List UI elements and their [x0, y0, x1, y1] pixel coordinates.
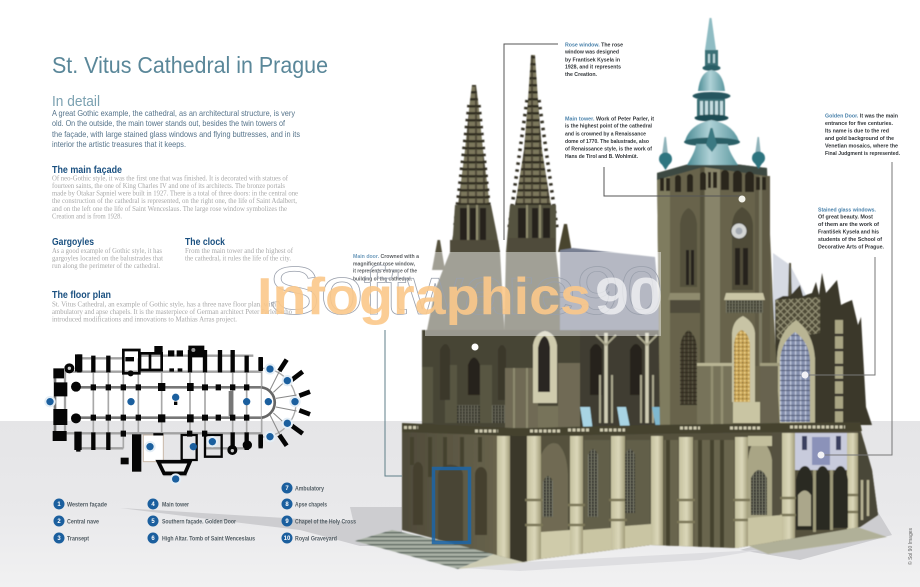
- legend: floor plan key: Royal Graveyard: [295, 536, 337, 542]
- callout: stained glass windows: Of great beauty. Most: [818, 215, 873, 221]
- callout: golden door: Golden Door. It was the main: [825, 113, 898, 119]
- watermark: Infographics: [257, 268, 591, 326]
- watermark: 90: [595, 268, 663, 326]
- section: the main façade: the construction of the cathedral is represented, on the right one, the life of Saint Adalbert,: [52, 196, 297, 205]
- section: the clock: From the main tower and the highest of: [185, 246, 294, 255]
- callout: golden door: and gold background of the: [825, 136, 895, 142]
- callout: stained glass windows: František Kysela and his: [818, 230, 879, 236]
- background: ground: [0, 421, 920, 587]
- legend: floor plan key: Ambulatory: [295, 486, 325, 492]
- section: gargoyles: [52, 236, 163, 270]
- callout: main door: it represents entrance of the: [353, 269, 418, 275]
- text block: introduction: A great Gothic example, the cathedral, as an architectural structure, is very: [52, 109, 296, 118]
- callout: rose window: [564, 42, 624, 78]
- right choir and buttresses: [773, 253, 872, 425]
- floor plan: [44, 346, 310, 485]
- left spire: [455, 85, 491, 225]
- callout: main tower: and is crowned by a Renaissance: [565, 131, 647, 137]
- legend: floor plan key: 3: [57, 536, 61, 542]
- callout: main tower: is the highest point of the cathedral: [565, 124, 652, 130]
- section: gargoyles: As a good example of Gothic style, it has: [52, 246, 162, 255]
- legend: floor plan key: Central nave: [67, 520, 100, 526]
- callout: main tower: [565, 117, 654, 160]
- callout: stained glass windows: Decorative Arts of Prague.: [818, 245, 884, 251]
- legend: floor plan key: [54, 482, 357, 544]
- section: the floor plan: introduced modifications and innovations to Mathias Arras project.: [52, 314, 237, 324]
- legend: floor plan key: 8: [285, 502, 289, 508]
- marker: rose window: [472, 344, 478, 350]
- callout lines: [385, 44, 892, 476]
- legend: floor plan key: Apse chapels: [295, 502, 328, 508]
- callout: rose window: window was designed: [564, 50, 619, 56]
- section: the main façade: made by Otakar Sapniel were built in 1927. There is a total of three doors: in the central one: [52, 188, 298, 198]
- callout: golden door: Venetian mosaics, where the: [825, 143, 899, 149]
- callout: rose window: 1928, and it represents: [565, 65, 621, 71]
- text block: introduction: interior the artistic treasures that it keeps.: [52, 140, 186, 149]
- callout: rose window: the Creation.: [565, 72, 597, 78]
- callout: main door: building of the cathedral.: [353, 276, 412, 282]
- image credit: © Sol 90 Images: [907, 528, 914, 565]
- section: the clock: the cathedral, it rules the life of the city.: [185, 254, 291, 262]
- pilasters: [497, 433, 858, 567]
- text block: introduction: [52, 109, 300, 149]
- plan number markers: [44, 363, 301, 485]
- callout: rose window: Rose window. The rose: [565, 42, 624, 48]
- callout: main tower: of Renaissance style, is the work of: [565, 146, 652, 152]
- callout: main door: Main door. Crowned with a: [353, 254, 420, 260]
- stone steps: [355, 527, 887, 569]
- legend: floor plan key: 6: [151, 536, 155, 542]
- legend: floor plan key: 4: [151, 502, 155, 508]
- callout: golden door: Its name is due to the red: [825, 129, 889, 135]
- legend: floor plan key: High Altar. Tomb of Saint Wenceslaus: [162, 536, 256, 542]
- marker: main tower: [738, 196, 746, 202]
- twin tower bodies: [425, 205, 572, 340]
- callout: stained glass windows: of them are the work of: [818, 222, 879, 228]
- section: the floor plan: The floor plan: [52, 289, 111, 301]
- watermark: Software90: [268, 253, 663, 329]
- callout: golden door: [825, 113, 900, 157]
- section: gargoyles: run along the perimeter of the cathedral.: [52, 261, 160, 270]
- right spire: [509, 55, 557, 228]
- callout: stained glass windows: students of the School of: [818, 237, 882, 243]
- callout: main tower: Hans de Tirol and B. Wohlmüt.: [565, 154, 638, 160]
- balustrade: [402, 422, 862, 436]
- text block: introduction: old. On the outside, the main tower stands out, besides the twin towers of: [52, 119, 286, 128]
- callout: main door: [353, 254, 420, 282]
- title: St. Vitus Cathedral in Prague: [52, 52, 328, 78]
- callout: golden door: Final Judgment is represented.: [825, 151, 900, 157]
- section: the main façade: fourteen saints, the one of King Charles IV and one of its architects. The bronze portals: [52, 181, 285, 190]
- legend: floor plan key: Chapel of the Holy Cross: [295, 520, 357, 526]
- callout: main tower: dome of 1770. The balustrade, also: [565, 139, 649, 145]
- section: the clock: [185, 236, 294, 262]
- upper façade: [422, 330, 663, 433]
- cathedral illustration: [355, 18, 887, 569]
- legend: floor plan key: Main tower: [162, 502, 190, 508]
- callout: rose window: by Frantisek Kysela in: [565, 57, 620, 63]
- section: the main façade: Of neo-Gothic style, it was the first one that was finished. It is decorated with statues of: [52, 174, 289, 182]
- section: the main façade: and on the left one the life of Saint Wenceslaus. The large rose window symbolizes the: [52, 204, 287, 213]
- tower dome and lantern: [659, 18, 765, 170]
- section: gargoyles: Gargoyles: [52, 236, 94, 248]
- marker: stained glass: [802, 372, 808, 378]
- legend: floor plan key: 5: [151, 519, 155, 525]
- callout: main tower: Main tower. Work of Peter Parler, it: [565, 117, 654, 123]
- cathedral shadow: [120, 507, 892, 571]
- highlight: main door: [434, 468, 470, 542]
- lower walls: [402, 425, 880, 568]
- section: the main façade: Creation and is from 1928.: [52, 212, 122, 220]
- legend: floor plan key: 7: [285, 486, 289, 492]
- legend: floor plan key: Western façade: [67, 502, 108, 508]
- section: the floor plan: [52, 289, 292, 324]
- section: the main façade: The main façade: [52, 164, 122, 176]
- main tower: [657, 160, 780, 428]
- section: gargoyles: gargoyles located on the balustrades that: [52, 254, 163, 262]
- text block: introduction: the façade, with large stained glass windows and flying buttresses, and in its: [52, 130, 300, 139]
- callout: stained glass windows: Stained glass windows.: [818, 207, 876, 213]
- legend: floor plan key: Southern façade. Golden Door: [162, 520, 237, 526]
- legend: floor plan key: 1: [57, 502, 61, 508]
- callout: stained glass windows: [818, 207, 884, 251]
- legend: floor plan key: 9: [285, 519, 289, 525]
- legend: floor plan key: 10: [284, 536, 291, 542]
- section: the main façade: [52, 164, 298, 220]
- section: the floor plan: ambulatory and apse chapels. It is the masterpiece of German architect Peter Parler, who: [52, 307, 292, 316]
- legend: floor plan key: 2: [57, 519, 61, 525]
- callout: golden door: entrance for five centuries.: [825, 121, 893, 127]
- subheading: In detail: In detail: [52, 94, 100, 110]
- nave roof: [560, 248, 662, 340]
- callout: main door: magnificent rose window,: [353, 261, 415, 267]
- marker: golden door: [818, 452, 824, 458]
- legend: floor plan key: Transept: [67, 536, 89, 542]
- section: the floor plan: St. Vitus Cathedral, an example of Gothic style, has a three nave floor plan, with: [52, 300, 276, 308]
- section: the clock: The clock: [185, 236, 225, 248]
